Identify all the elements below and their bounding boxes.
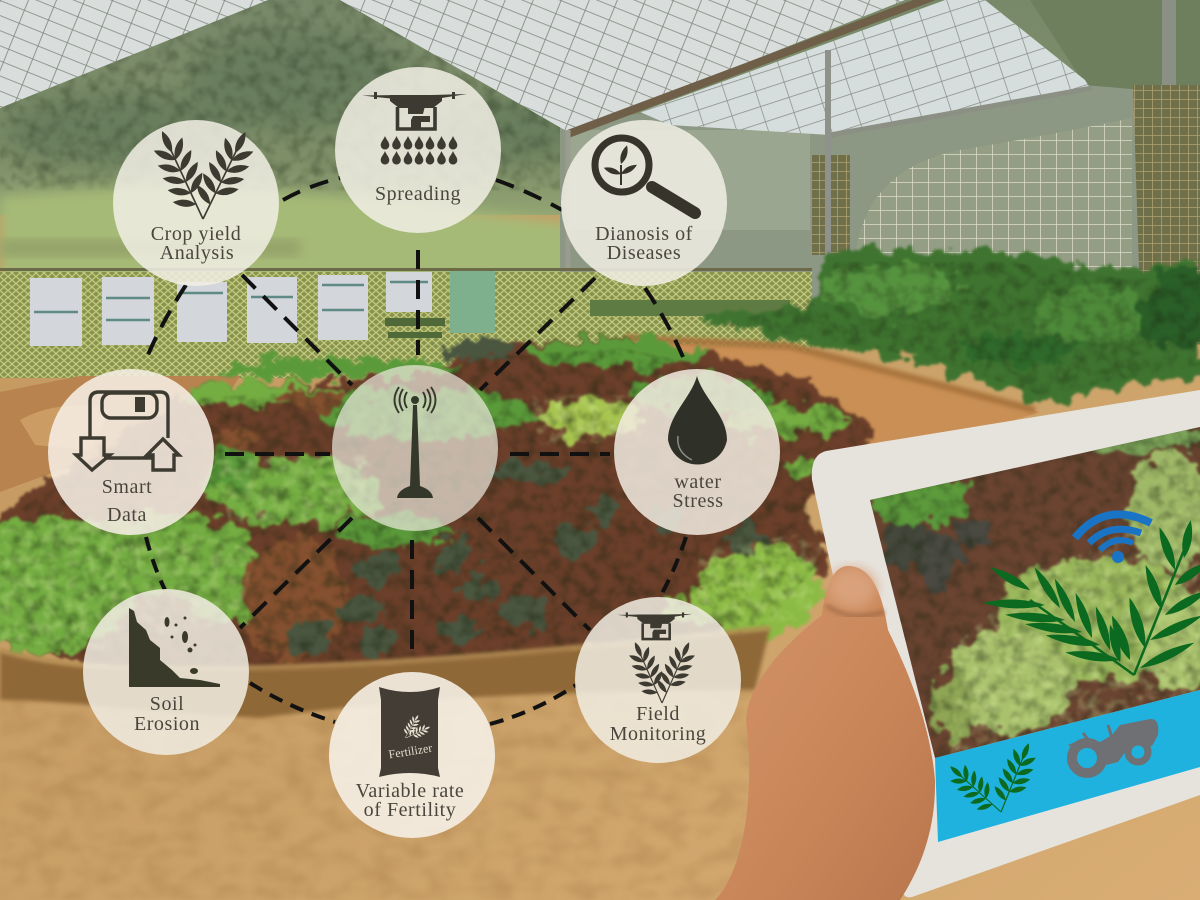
node: Smart Data: Data	[107, 504, 147, 526]
hand holding tablet	[715, 566, 935, 900]
node: Spreading	[335, 67, 501, 233]
icon: crop branches	[142, 122, 265, 228]
node: Field Monitoring	[575, 597, 741, 763]
fence with posters	[0, 272, 812, 378]
node: central antenna	[332, 365, 498, 531]
tablet frame	[812, 390, 1200, 897]
label: Smart	[102, 476, 152, 498]
icon: fertilizer bag: Fertilizer	[388, 741, 433, 761]
label: Field	[636, 703, 680, 725]
left path	[0, 376, 240, 492]
hillside behind greenhouse	[0, 0, 1200, 215]
node: Diagnosis of Diseases: Diseases	[607, 242, 681, 264]
icon: data transfer diagram	[76, 392, 179, 470]
label: Dianosis of	[595, 223, 693, 245]
icon: eroding soil	[129, 608, 220, 687]
icon: spraying drone	[362, 92, 467, 164]
node: water Stress: Stress	[672, 490, 724, 512]
right side greenhouse background	[560, 70, 1200, 310]
orange path on right	[640, 342, 1040, 462]
label: water	[674, 471, 722, 493]
icon: green palm branches	[982, 519, 1200, 675]
icon: tractor	[1068, 719, 1158, 773]
node: Soil Erosion: Erosion	[134, 713, 200, 735]
dashed network connections	[146, 178, 686, 724]
garden plants	[0, 339, 850, 662]
label: Spreading	[375, 183, 461, 205]
garden bed soil	[0, 338, 880, 680]
tablet	[715, 390, 1200, 900]
node: water Stress	[614, 369, 780, 535]
label: Variable rate	[356, 780, 464, 802]
greenhouse roof	[0, 0, 268, 108]
node: Field Monitoring: Monitoring	[610, 723, 706, 745]
raised bed border	[0, 628, 770, 718]
label: Crop yield	[151, 223, 241, 245]
icon: wifi	[1075, 514, 1151, 563]
node: Diagnosis of Diseases	[561, 120, 727, 286]
node: Soil Erosion	[83, 589, 249, 755]
right foliage	[700, 250, 1200, 405]
icon: drone over crop	[617, 612, 702, 709]
node: Variable rate of Fertility: of Fertility	[364, 799, 456, 821]
icon: small wheat on band	[940, 737, 1044, 824]
icon: magnifier with plant	[595, 138, 695, 213]
label: Soil	[150, 693, 184, 715]
node: Crop yield Analysis: Analysis	[160, 242, 234, 264]
blue menu band	[935, 690, 1200, 842]
icon: radio tower	[394, 387, 436, 498]
node: Smart Data	[48, 369, 214, 535]
tablet screen photo	[860, 420, 1200, 765]
node: Variable rate of Fertility	[329, 672, 495, 838]
lawn	[0, 186, 820, 285]
node: Crop yield Analysis	[113, 120, 279, 286]
icon: water drop	[668, 376, 727, 465]
icon: fertilizer bag	[379, 687, 440, 777]
